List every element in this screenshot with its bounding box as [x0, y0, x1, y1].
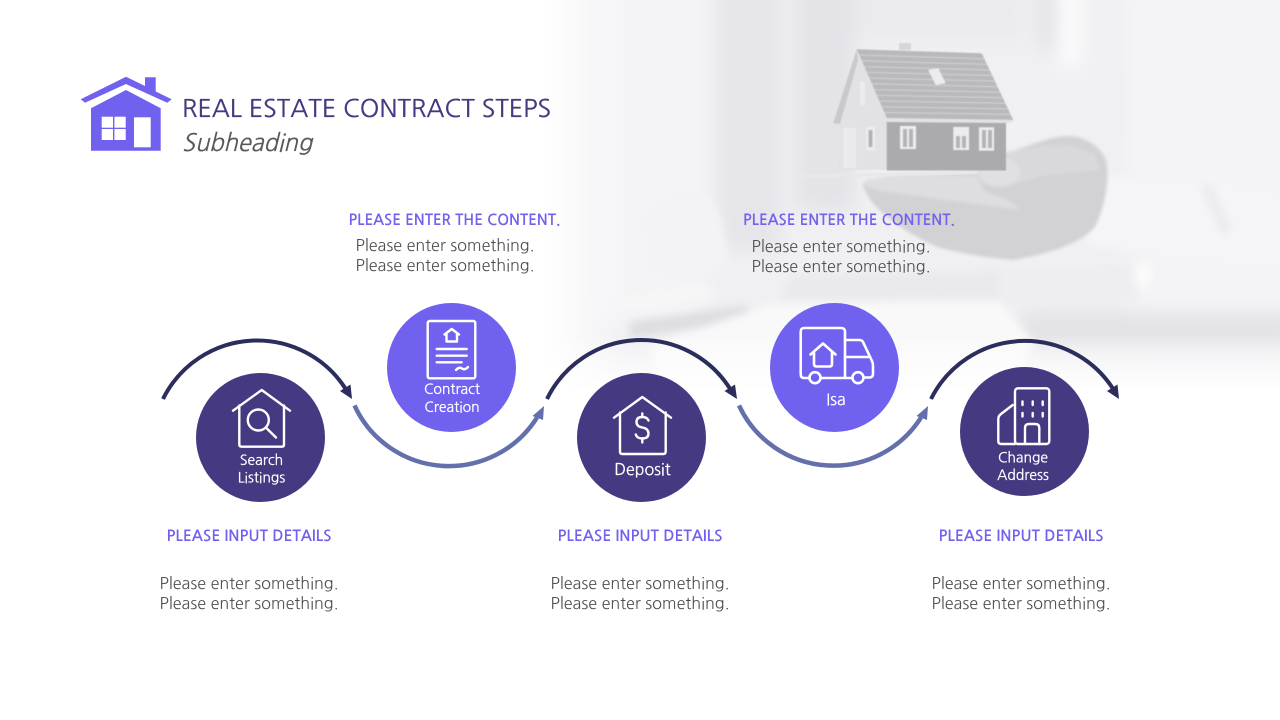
step 1: search listings: Search [240, 453, 283, 468]
arrow: arc 2 [354, 405, 544, 466]
text block: step 5 details: Please enter something. [932, 576, 1110, 592]
fade overlays [544, 0, 630, 400]
arrow: arc 1 [163, 340, 352, 399]
background photo: hand holding model house [544, 0, 1280, 411]
step 4: isa: Isa [826, 392, 846, 408]
text block: step 1 details: Please enter something. [160, 576, 338, 592]
subheading: Subheading [182, 131, 313, 155]
text block: step 1 details: PLEASE INPUT DETAILS [166, 529, 332, 544]
model house [793, 43, 1013, 178]
step 5: change address [960, 367, 1089, 496]
text block: step 3 details [550, 529, 730, 612]
text block: step 5 details: Please enter something. [932, 596, 1110, 612]
title: REAL ESTATE CONTRACT STEPS [182, 97, 551, 121]
text block: step 2 content [348, 213, 560, 274]
text block: step 2 content: PLEASE ENTER THE CONTENT. [348, 213, 560, 228]
icon: office building [998, 388, 1049, 444]
text block: step 3 details: Please enter something. [550, 576, 730, 592]
step 5: change address: Change [998, 450, 1048, 466]
text block: step 2 content: Please enter something. [356, 258, 534, 274]
text block: step 5 details: PLEASE INPUT DETAILS [938, 529, 1104, 544]
text block: step 4 content: PLEASE ENTER THE CONTENT. [743, 213, 955, 228]
step 3: deposit [577, 373, 706, 502]
step 2: contract creation: Contract [424, 383, 481, 397]
text block: step 4 content: Please enter something. [752, 259, 930, 275]
text block: step 2 content: Please enter something. [356, 238, 534, 254]
text block: step 3 details: PLEASE INPUT DETAILS [558, 529, 722, 544]
icon: moving truck [801, 328, 873, 383]
text block: step 4 content [743, 213, 955, 275]
logo icon: house [81, 77, 172, 151]
step 2: contract creation: Creation [424, 401, 480, 415]
arrow: arc 3 [547, 340, 737, 399]
text block: step 1 details: Please enter something. [160, 596, 338, 612]
icon: contract document [428, 321, 475, 378]
step 1: search listings [196, 373, 325, 502]
text block: step 4 content: Please enter something. [752, 239, 930, 255]
icon: house with dollar [614, 397, 671, 454]
step 2: contract creation [387, 303, 516, 432]
arrow: arc 4 [739, 405, 928, 466]
text block: step 3 details: Please enter something. [550, 596, 730, 612]
step 5: change address: Address [997, 468, 1049, 483]
hand [863, 136, 1107, 260]
step 1: search listings: Listings [238, 472, 285, 486]
text block: step 5 details [932, 529, 1110, 612]
icon: house with magnifier [233, 390, 290, 447]
arrow: arc 5 [931, 341, 1119, 399]
step 3: deposit: Deposit [614, 462, 671, 478]
text block: step 1 details [160, 529, 338, 612]
step 4: isa [770, 303, 899, 432]
